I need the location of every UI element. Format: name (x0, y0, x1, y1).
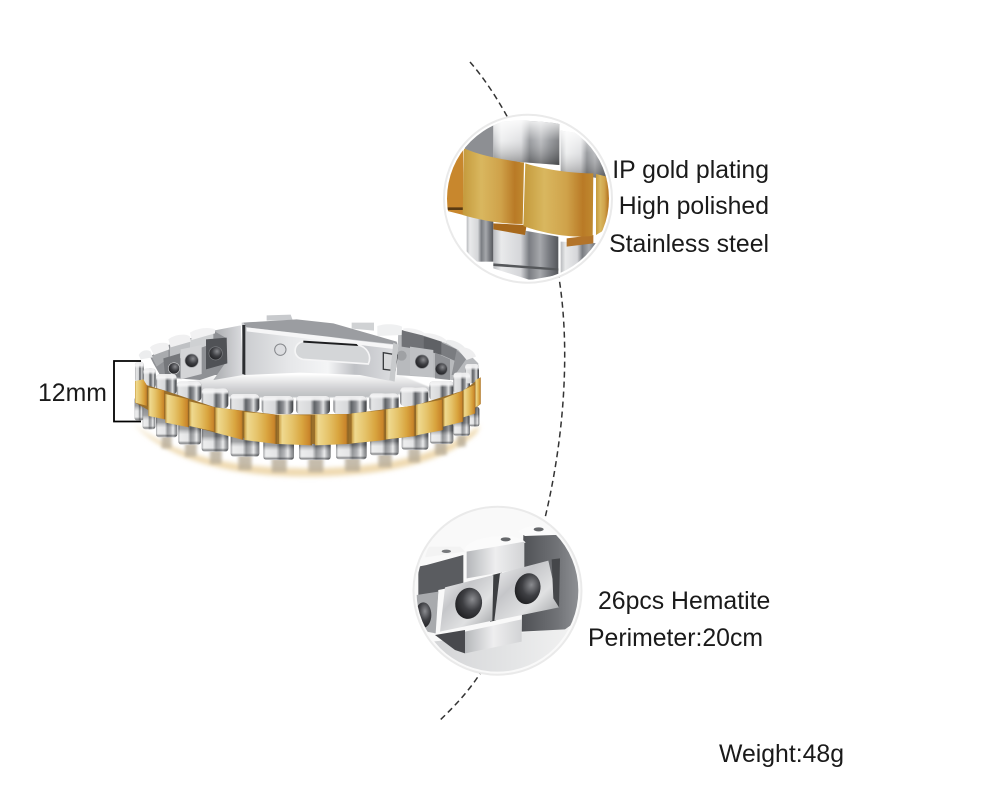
dark brushed background (522, 535, 580, 632)
upper silver links (135, 362, 479, 414)
clasp edge (552, 558, 560, 607)
lower silver link (493, 225, 558, 280)
hematite stones (455, 588, 482, 619)
left plate (440, 575, 493, 632)
gold link 2 (523, 163, 593, 237)
lower floor shade (434, 628, 568, 672)
top caps (425, 547, 465, 557)
far-left plate (417, 592, 438, 633)
dashed connector curve (438, 62, 565, 722)
dark back link (465, 126, 494, 158)
text: plating specs: High polished (619, 193, 769, 220)
clasp (242, 315, 398, 382)
gold centre links (135, 377, 481, 445)
reflection under bracelet (133, 423, 480, 477)
detail circle: gold plating (443, 115, 612, 283)
text: hematite specs: Perimeter:20cm (588, 625, 763, 652)
infographic canvas (40, 62, 842, 767)
lower right silver link (560, 242, 596, 273)
lower silver links (135, 397, 479, 460)
right plate (494, 561, 559, 621)
text: hematite specs (588, 588, 770, 652)
gold band shadow (135, 377, 481, 444)
left dark link (418, 555, 463, 633)
text: plating specs: Stainless steel (609, 231, 769, 258)
right gold segment (596, 174, 610, 235)
inner surface (180, 375, 437, 397)
upper silver link (493, 121, 559, 165)
dark gap (490, 573, 502, 622)
text: plating specs: IP gold plating (612, 157, 769, 184)
size bracket (114, 361, 141, 422)
upper block (467, 542, 524, 578)
bracelet photo (133, 315, 481, 477)
right back links (377, 324, 478, 380)
text: plating specs (609, 157, 769, 258)
text: hematite specs: 26pcs Hematite (598, 588, 770, 615)
right silver link (561, 131, 608, 180)
size label: 12mm: 12mm (38, 380, 107, 407)
detail circle: hematite (414, 507, 582, 675)
left gold segment (447, 150, 464, 215)
lower block (465, 619, 522, 653)
lower left silver link (467, 215, 493, 262)
gold link 1 (463, 148, 524, 224)
shadow under gold (493, 223, 527, 235)
text: weight: Weight:48g (719, 741, 844, 768)
left back links (139, 325, 243, 380)
